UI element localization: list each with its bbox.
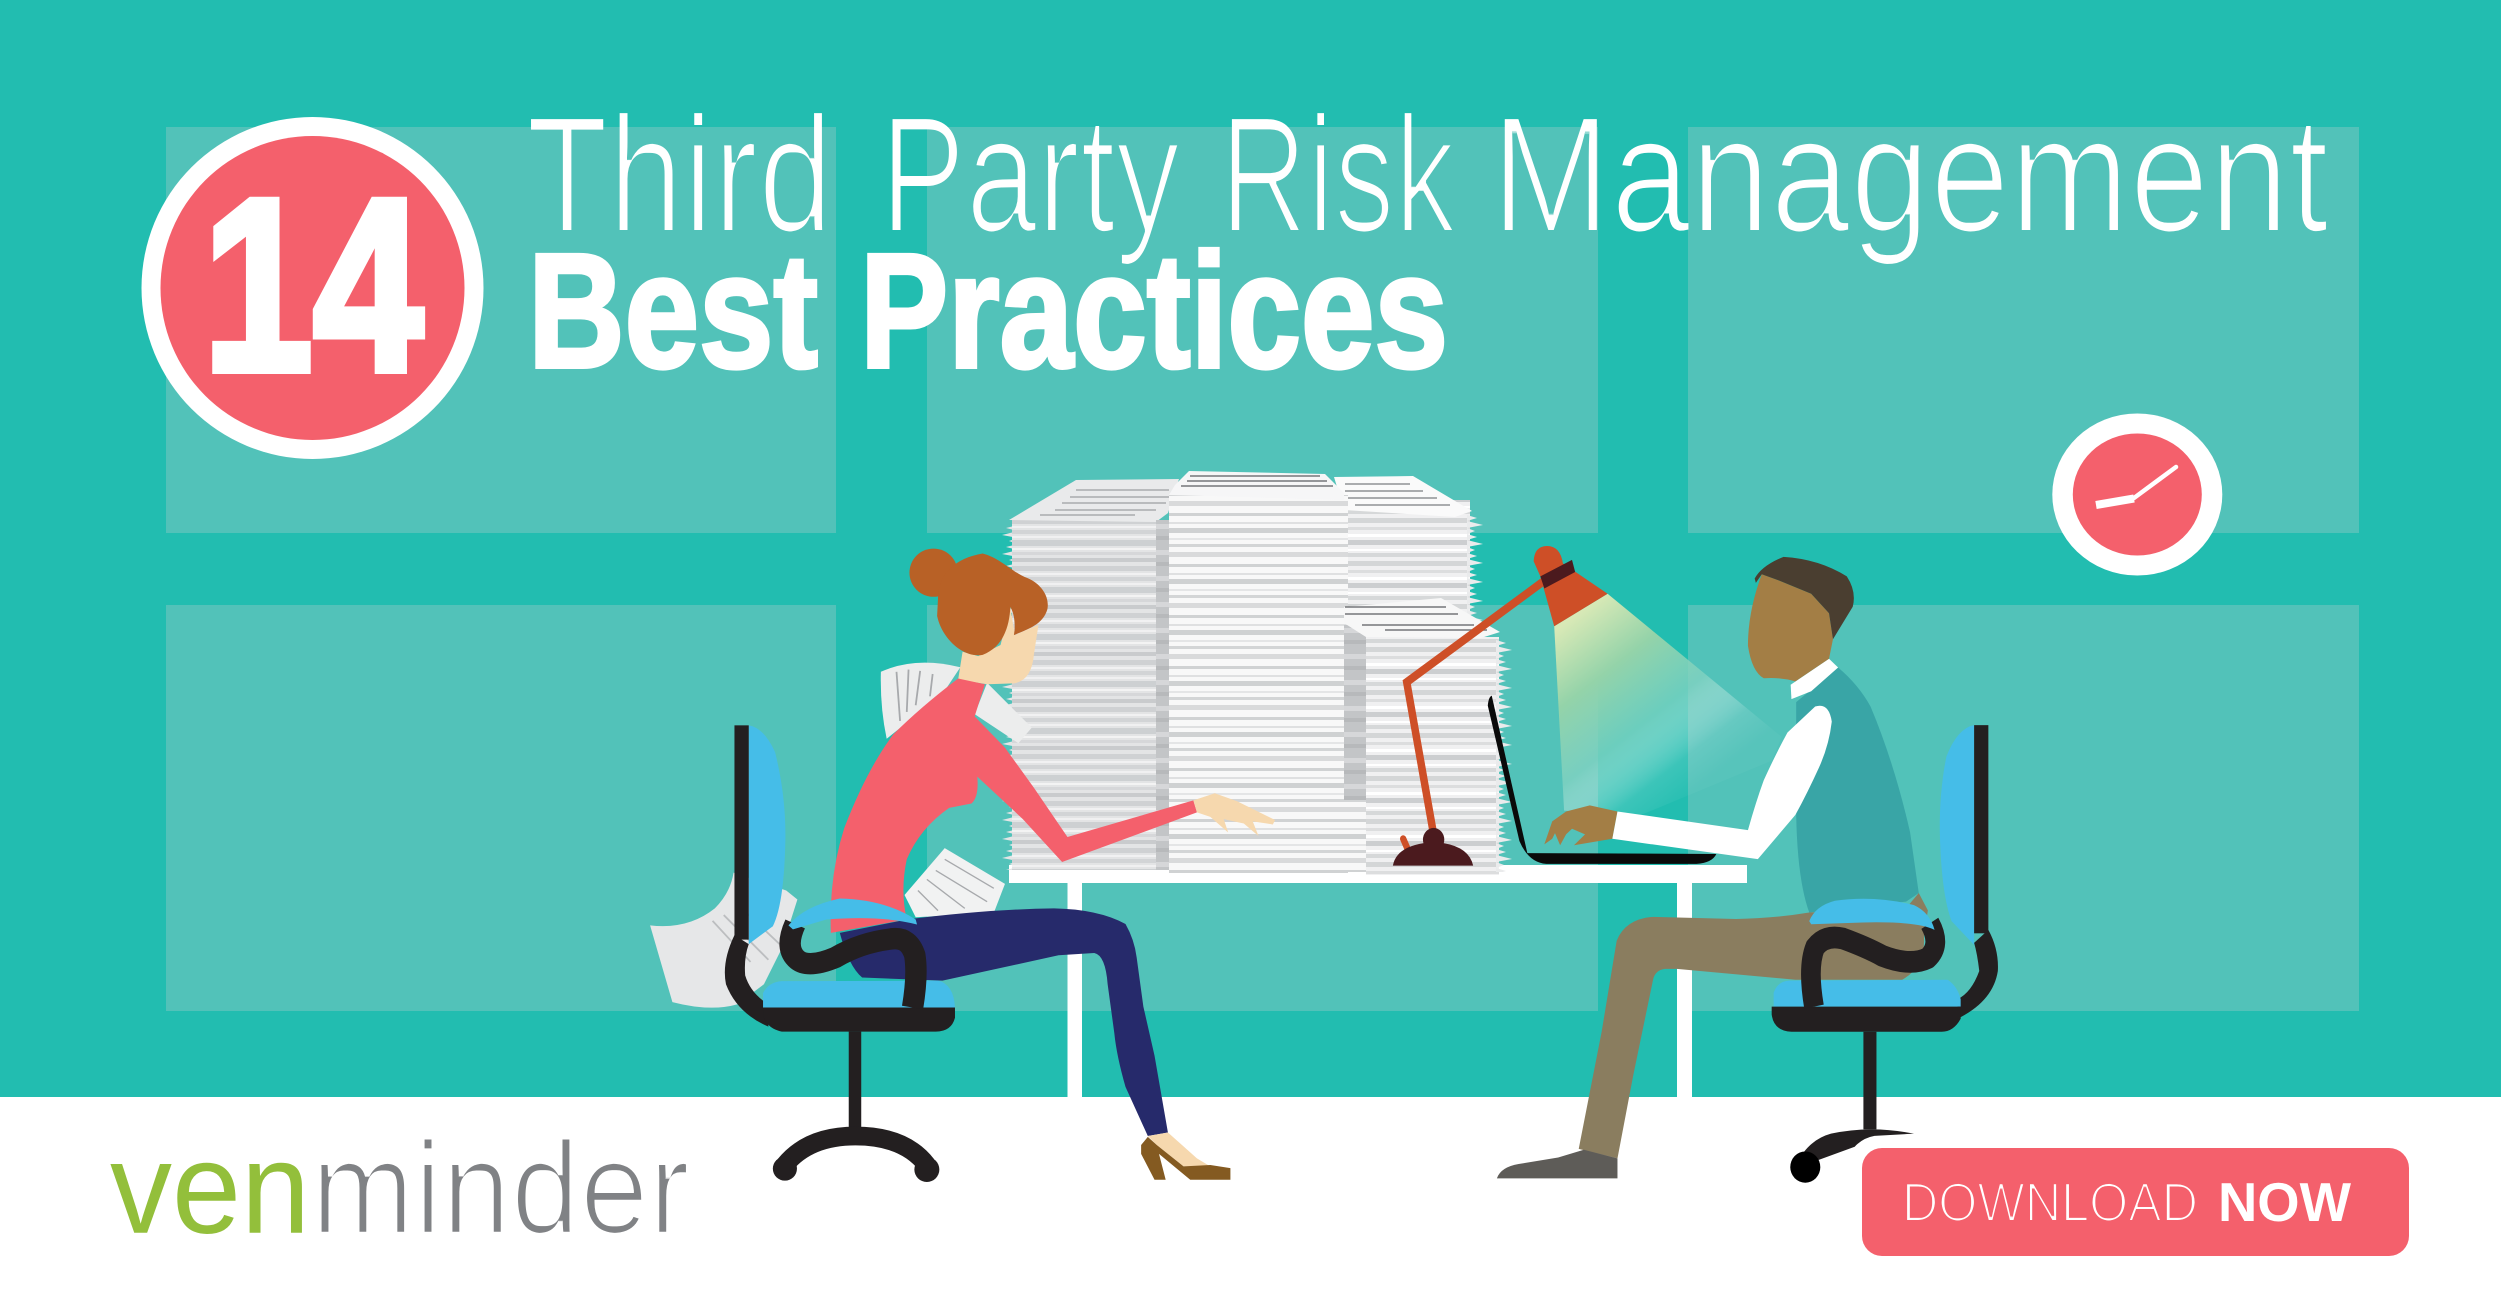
- lamp base: [1393, 828, 1473, 866]
- hair and bun: [909, 549, 1048, 655]
- lamp stub: [1403, 839, 1408, 850]
- logo word: minder: minder: [311, 1115, 690, 1261]
- chair armrest: [1809, 899, 1935, 1007]
- button text: download: DOWNLOAD: [1902, 1171, 2198, 1233]
- middle stack: [1169, 471, 1348, 873]
- window panes: [166, 127, 2359, 1011]
- light beam: [1554, 594, 1782, 815]
- pants: [840, 908, 1168, 1136]
- small front stack: [1344, 598, 1512, 875]
- middle gutter: [1156, 520, 1173, 870]
- collar: [1791, 659, 1838, 699]
- number badge: 14: [203, 148, 423, 423]
- heading line two: [528, 219, 1448, 402]
- man at laptop with chair: [1488, 557, 1998, 1183]
- heading line one: Risk: [1220, 83, 1456, 266]
- title block: [142, 83, 2329, 459]
- hand: [1193, 793, 1275, 836]
- woman at desk with chair: [650, 549, 1275, 1182]
- venminder logo: [110, 1115, 690, 1261]
- lamp arm: [1407, 582, 1543, 834]
- download button: [1862, 1148, 2409, 1256]
- face: [1748, 574, 1833, 681]
- white floor band: [0, 1097, 2501, 1314]
- heading line two: Best: [528, 219, 818, 402]
- paper behind shoulder: [881, 663, 960, 739]
- office chair back: [1772, 725, 1998, 1183]
- heading line two: Practices: [860, 219, 1448, 402]
- sweater: [831, 678, 1197, 933]
- trousers: [1579, 893, 1928, 1158]
- office chair: [725, 725, 955, 1182]
- shirt sleeve: [1612, 706, 1832, 859]
- laptop: [1488, 696, 1716, 864]
- button text: now: NOW: [2218, 1171, 2351, 1233]
- lamp shade: [1534, 546, 1608, 626]
- number badge: [142, 117, 484, 459]
- hand: [1544, 805, 1617, 845]
- desk lamp and light beam: [1393, 546, 1782, 866]
- lamp collar: [1540, 560, 1575, 589]
- paper under arm: [905, 848, 1005, 917]
- foot and shoe: [1141, 1132, 1230, 1180]
- logo word: ven: ven: [110, 1115, 310, 1261]
- flying paper behind chair: [650, 873, 797, 1008]
- face and neck: [958, 607, 1038, 684]
- vest: [1796, 667, 1919, 912]
- shoe: [1497, 1150, 1617, 1178]
- heading line one: Management: [1491, 83, 2329, 266]
- icon: wall clock: [2052, 414, 2222, 576]
- heading line one: Third: [526, 83, 833, 266]
- heading line one: [526, 83, 2329, 266]
- paper stacks: [1002, 471, 1512, 875]
- desk: [1009, 865, 1747, 1100]
- paper beside neck: [975, 683, 1032, 743]
- hair: [1755, 557, 1854, 639]
- right upper stack: [1334, 476, 1483, 670]
- left stack: [1002, 479, 1179, 870]
- heading line one: Party: [880, 83, 1180, 266]
